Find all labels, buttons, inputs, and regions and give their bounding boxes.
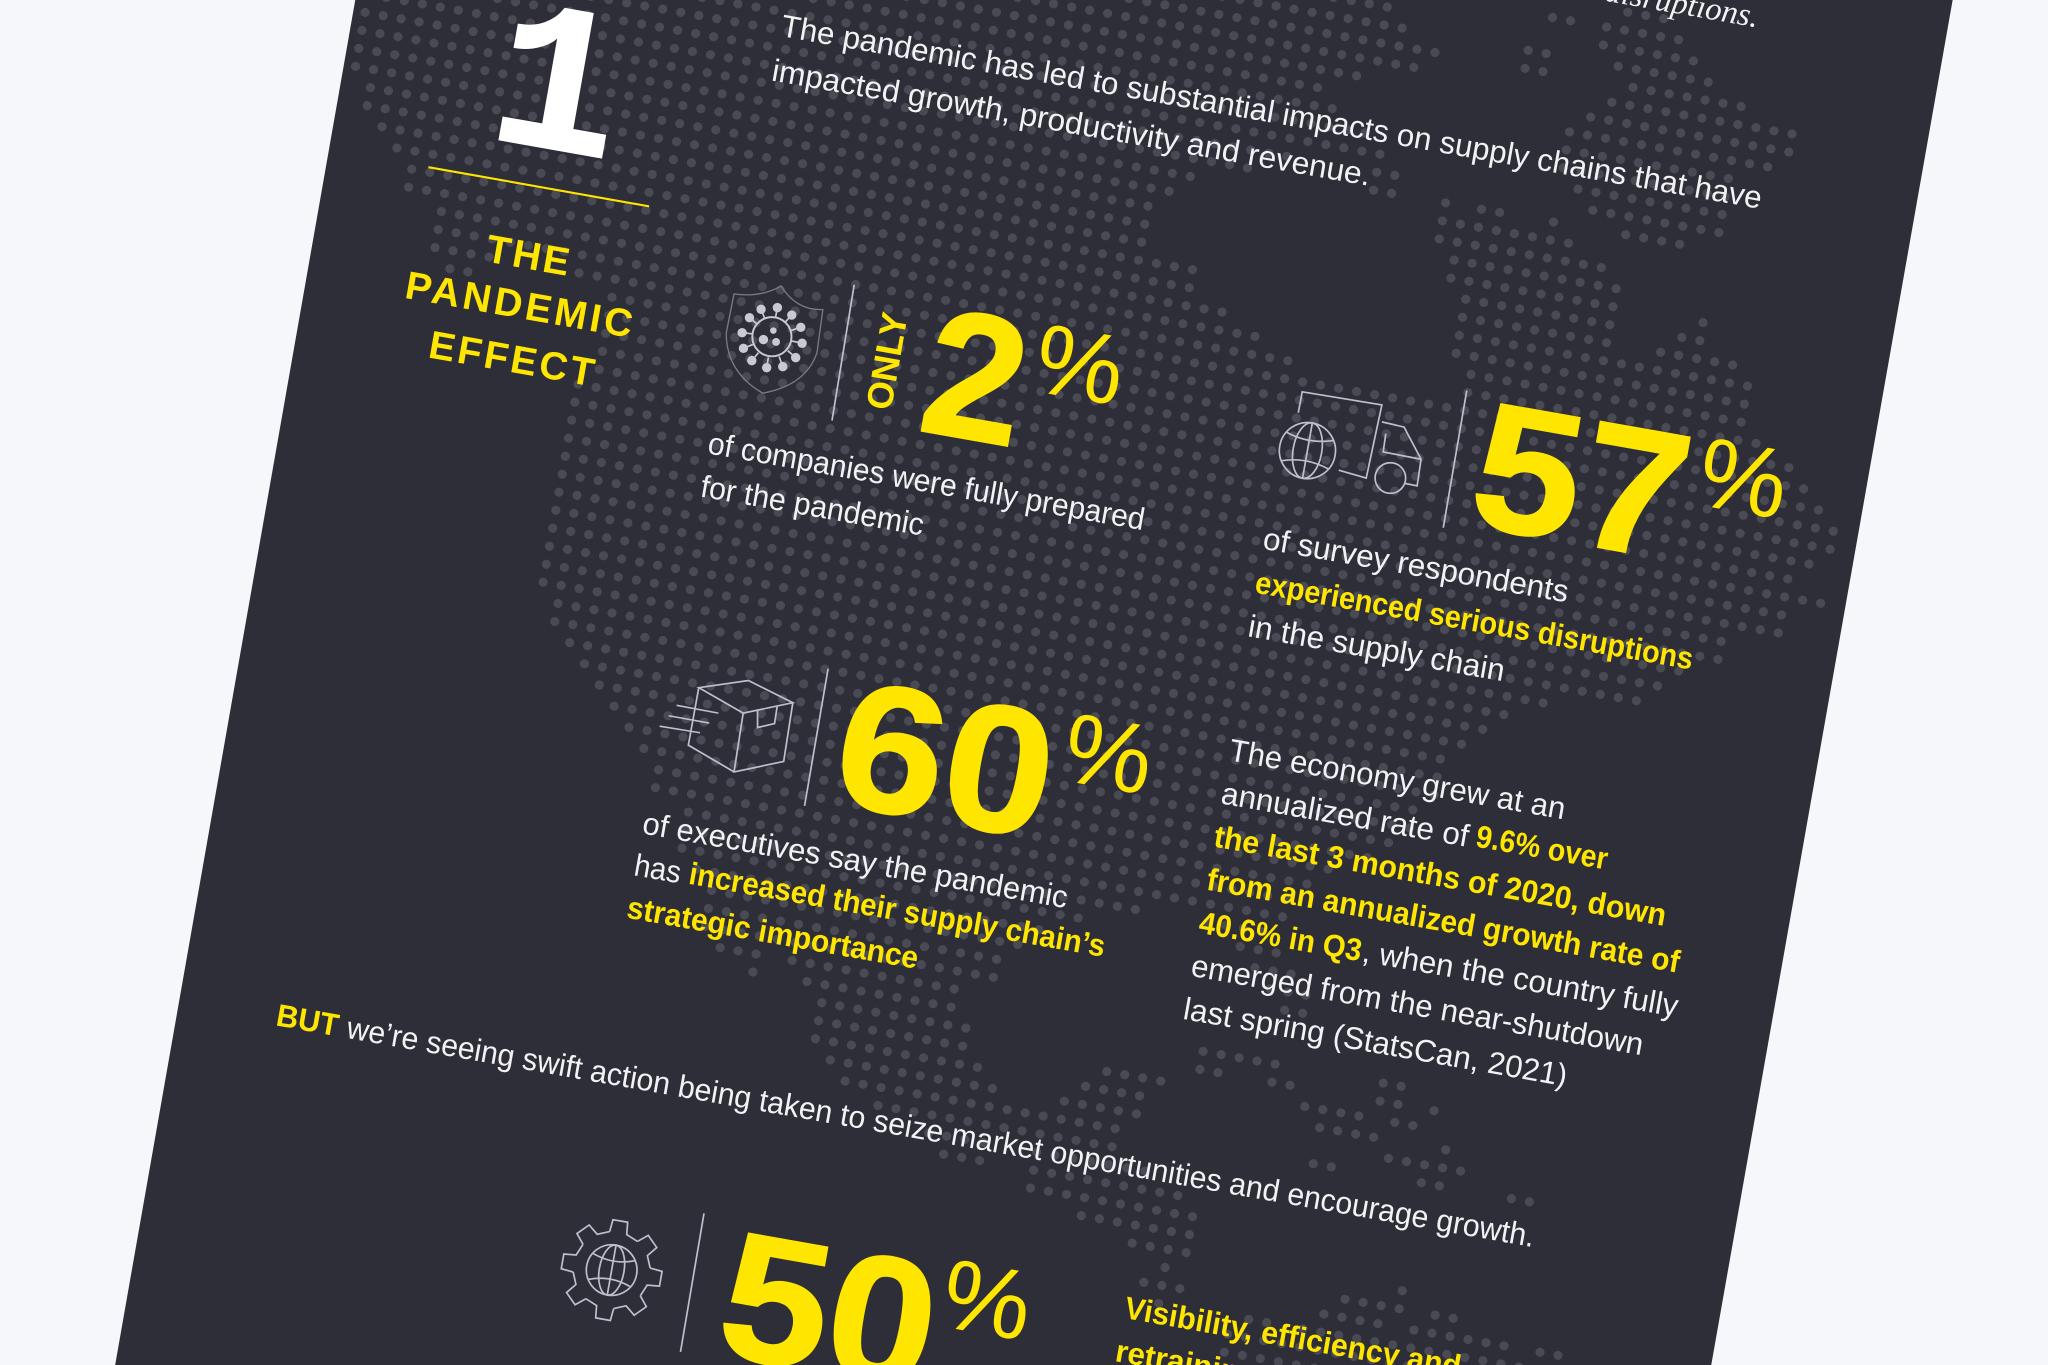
- text block: economy growth: 40.6% in Q3: [1196, 905, 1365, 968]
- divider: [805, 669, 828, 806]
- caption: [624, 806, 1108, 976]
- transition sentence: we’re seeing swift action being taken to seize market opportunities and encourage growth.: [343, 1010, 1538, 1254]
- stat panel: 2 percent: [698, 270, 1148, 542]
- section heading: the pandemic effect: EFFECT: [426, 324, 598, 395]
- intro paragraph: impacted growth, productivity and revenue.: [769, 53, 1374, 193]
- divider: [680, 1213, 704, 1352]
- caption: of survey respondents: [1260, 521, 1571, 609]
- number: 57: 57: [1459, 364, 1705, 599]
- text block: economy growth: the last 3 months of 2020, down: [1212, 819, 1669, 933]
- transition sentence: BUT: [274, 998, 342, 1043]
- caption: [1246, 521, 1696, 688]
- caption: increased their supply chain’s: [686, 856, 1108, 964]
- caption: for the pandemic: [698, 469, 927, 542]
- text block: economy growth: emerged from the near-shutdown: [1189, 948, 1646, 1062]
- label: only: ONLY: [858, 309, 916, 413]
- caption: has: [632, 848, 684, 890]
- intro paragraph: The pandemic has led to substantial impacts on supply chains that have: [779, 8, 1765, 216]
- caption: of companies were fully prepared: [705, 426, 1148, 537]
- icon: truck and globe: [1275, 392, 1421, 493]
- icon: moving box: [660, 680, 793, 772]
- yellow rule under number: [428, 167, 649, 206]
- percent sign: %: [1055, 692, 1162, 817]
- percent sign: %: [934, 1238, 1040, 1363]
- number: 60: 60: [821, 642, 1070, 878]
- caption: of executives say the pandemic: [640, 806, 1071, 915]
- stat panel: 60 percent: [624, 642, 1162, 976]
- section heading: the pandemic effect: [402, 228, 636, 395]
- caption: strategic importance: [624, 890, 921, 976]
- dotted world map background: [351, 0, 1838, 1365]
- text block: economy growth: 9.6% over: [1473, 819, 1611, 876]
- text block: economy growth: The economy grew at an: [1227, 733, 1568, 826]
- stat panel: 57 percent: [1246, 364, 1796, 688]
- text block: economy growth: from an annualized growth rate of: [1204, 862, 1683, 980]
- divider: [832, 285, 854, 421]
- text block: economy growth: , when the country fully: [1360, 934, 1681, 1024]
- percent sign: %: [1027, 303, 1133, 428]
- caption: experienced serious disruptions: [1253, 565, 1696, 676]
- divider: [1443, 391, 1467, 528]
- text block: economy growth: [1181, 733, 1683, 1093]
- icon: shield with virus: [726, 286, 823, 393]
- number: 2: 2: [909, 270, 1042, 486]
- section heading: the pandemic effect: THE: [483, 228, 573, 285]
- stat panel: 50 percent: [554, 1194, 1040, 1365]
- percent sign: %: [1690, 417, 1796, 541]
- caption: in the supply chain: [1246, 609, 1508, 688]
- icon: gear with globe: [554, 1212, 669, 1328]
- section heading: the pandemic effect: PANDEMIC: [402, 264, 636, 347]
- text block: economy growth: last spring (StatsCan, 2021): [1181, 991, 1570, 1093]
- text block: economy growth: annualized rate of: [1219, 776, 1472, 854]
